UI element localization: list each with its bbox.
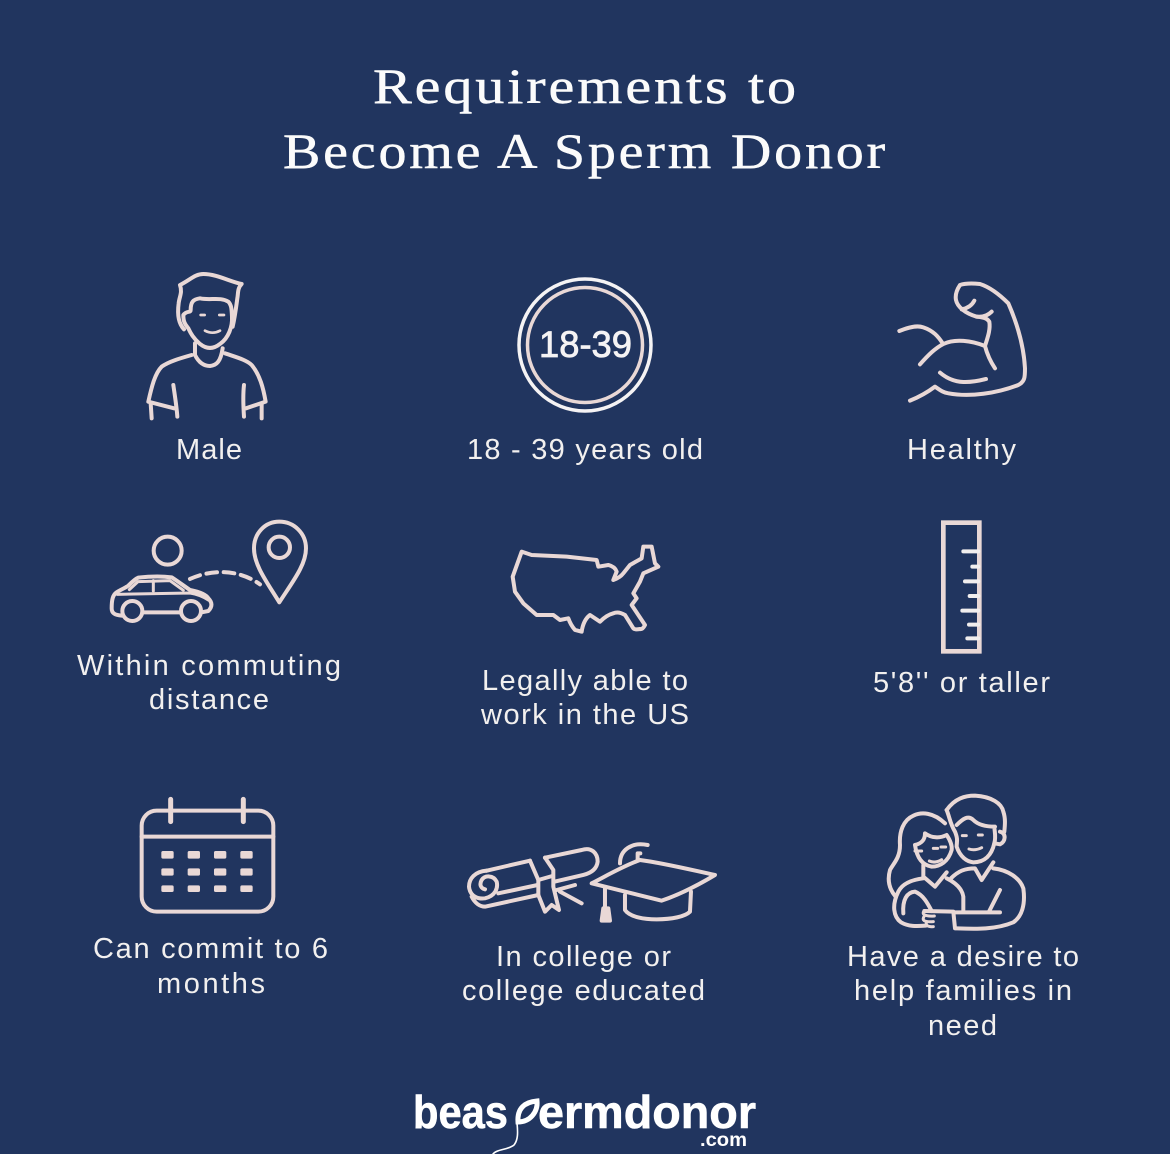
label: work in US: Legally able to bbox=[482, 665, 688, 697]
icon: flexed arm bbox=[899, 284, 1025, 401]
panel: age bbox=[467, 279, 703, 466]
label: college bbox=[462, 941, 705, 1007]
icon: sperm letter p bbox=[493, 1101, 537, 1154]
panel: healthy bbox=[899, 284, 1025, 466]
icon: couple embracing bbox=[889, 796, 1024, 929]
label: help families: Have a desire to bbox=[847, 941, 1079, 973]
panel: six months bbox=[93, 799, 328, 1000]
panel: commuting bbox=[77, 522, 341, 716]
panel: male bbox=[148, 274, 266, 466]
label: commuting bbox=[77, 650, 341, 716]
icon: man bbox=[148, 274, 266, 418]
label: height: 5'8'' or taller bbox=[873, 667, 1050, 699]
panel: height bbox=[873, 523, 1050, 699]
icon: car and map pin bbox=[112, 522, 306, 621]
panel: help families bbox=[847, 796, 1079, 1042]
label: work in US: work in the US bbox=[480, 699, 689, 731]
label: college: college educated bbox=[462, 975, 705, 1007]
logo: .com bbox=[700, 1130, 747, 1151]
title bbox=[283, 58, 888, 179]
label: help families: need bbox=[928, 1010, 997, 1042]
label: commuting: Within commuting bbox=[77, 650, 341, 682]
title: Requirements to bbox=[373, 58, 799, 114]
icon: age badge bbox=[519, 279, 651, 411]
label: age: 18 - 39 years old bbox=[467, 434, 703, 466]
label: six months bbox=[93, 933, 328, 1000]
icon: diploma and graduation cap bbox=[469, 844, 715, 921]
logo bbox=[413, 1086, 756, 1154]
panel: college bbox=[462, 844, 715, 1007]
label: college: In college or bbox=[496, 941, 671, 973]
icon: ruler bbox=[943, 523, 979, 651]
label: six months: months bbox=[157, 968, 265, 1000]
label: six months: Can commit to 6 bbox=[93, 933, 328, 965]
label: commuting: distance bbox=[149, 684, 269, 716]
label: healthy: Healthy bbox=[907, 434, 1016, 466]
label: help families bbox=[847, 941, 1079, 1042]
logo: beas bbox=[413, 1086, 508, 1138]
label: male: Male bbox=[176, 434, 242, 466]
panel: legally able to work bbox=[480, 547, 689, 731]
logo: ermdonor bbox=[538, 1086, 756, 1138]
label: help families: help families in bbox=[854, 975, 1072, 1007]
icon: US map bbox=[513, 547, 658, 632]
label: work in US bbox=[480, 665, 689, 731]
title: Become A Sperm Donor bbox=[283, 123, 888, 179]
icon: calendar bbox=[142, 799, 273, 912]
icon: age badge: 18-39 bbox=[539, 324, 632, 365]
